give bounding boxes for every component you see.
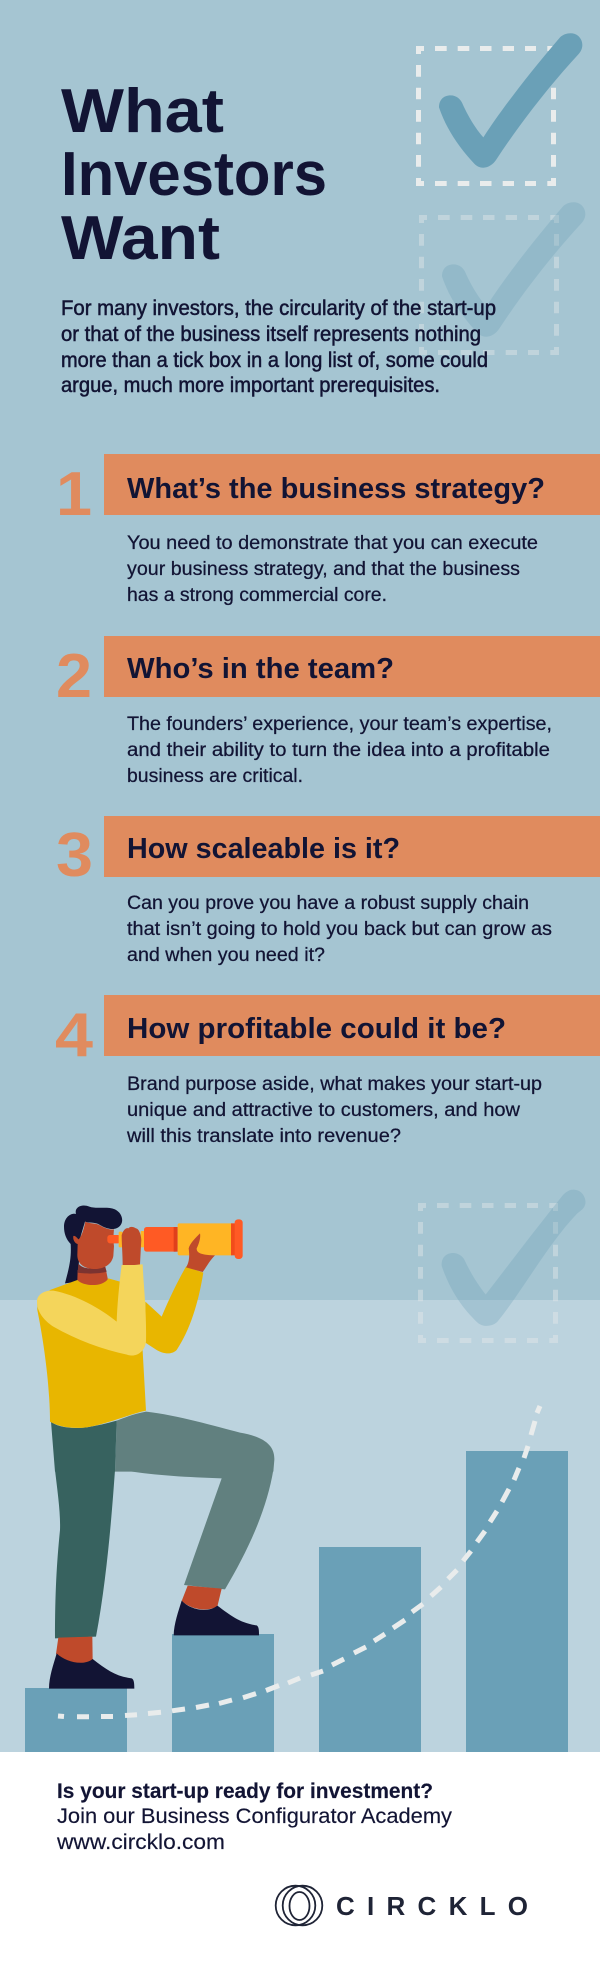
body text 3: and when you need it?: [127, 945, 325, 966]
body text 2: The founders’ experience, your team’s expertise,: [127, 714, 552, 735]
body text 1: [127, 533, 538, 606]
heading 1: What’s the business strategy?: [127, 473, 545, 505]
logo: Circklo: [276, 1886, 528, 1925]
face: [73, 1222, 114, 1269]
person: ankles and shoes: [49, 1586, 259, 1689]
raised far arm: [145, 1267, 203, 1353]
growth curve: dashed arrow line: [58, 1406, 540, 1717]
footer call to action: Join our Business Configurator Academy: [57, 1805, 453, 1828]
person: upper body, head and telescope: [37, 1205, 243, 1428]
body text 4: unique and attractive to customers, and how: [127, 1100, 520, 1121]
body text 2: [127, 714, 552, 787]
title: Investors: [61, 140, 327, 209]
icon: solid checkbox: [416, 33, 582, 186]
body text 1: your business strategy, and that the business: [127, 559, 520, 580]
body text 4: [126, 1074, 542, 1147]
body text 4: will this translate into revenue?: [126, 1126, 401, 1147]
panel: question 3: [56, 816, 600, 966]
icon: faded checkbox at horizon: [418, 1190, 586, 1343]
footer call to action: www.circklo.com: [56, 1831, 225, 1854]
footer call to action: [56, 1780, 453, 1854]
intro text: argue, much more important prerequisites.: [61, 374, 440, 397]
body text 3: that isn’t going to hold you back but can grow as: [127, 919, 552, 940]
heading bar 2: [104, 636, 600, 697]
near hand: [122, 1227, 141, 1265]
bar chart: rising steps: [25, 1451, 568, 1752]
number 3: 3: [56, 821, 93, 890]
background: white footer: [0, 1752, 600, 1970]
hair: [64, 1205, 122, 1283]
heading 3: How scaleable is it?: [127, 833, 400, 865]
body text 1: has a strong commercial core.: [127, 585, 387, 606]
intro text: [61, 297, 496, 397]
logo mark: [276, 1886, 322, 1925]
body text 2: and their ability to turn the idea into a profitable: [127, 740, 550, 761]
background: lower pale blue: [0, 1300, 600, 1752]
body text 1: You need to demonstrate that you can execute: [127, 533, 538, 554]
background: upper blue: [0, 0, 600, 1300]
sweater torso: [37, 1278, 146, 1428]
telescope: [107, 1219, 243, 1259]
body text 4: Brand purpose aside, what makes your start-up: [127, 1074, 542, 1095]
intro text: or that of the business itself represents nothing: [61, 323, 481, 346]
title: What: [61, 77, 224, 146]
footer call to action: Is your start-up ready for investment?: [57, 1780, 433, 1803]
title: [61, 77, 327, 273]
panel: question 2: [56, 636, 600, 787]
neck: [77, 1267, 108, 1286]
heading bar 1: [104, 454, 600, 515]
body text 3: [127, 893, 552, 966]
heading bar 4: [104, 995, 600, 1056]
heading bar 3: [104, 816, 600, 877]
panel: question 1: [56, 454, 600, 606]
body text 3: Can you prove you have a robust supply chain: [127, 893, 529, 914]
near arm sleeve: [37, 1264, 146, 1356]
title: Want: [61, 204, 220, 273]
heading 2: Who’s in the team?: [127, 653, 394, 685]
panel: question 4: [55, 995, 600, 1147]
icon: faded checkbox: [419, 202, 585, 355]
number 1: 1: [56, 460, 92, 529]
far hand: [186, 1233, 215, 1272]
body text 2: business are critical.: [127, 766, 303, 787]
illustration: investor with telescope: [37, 1205, 274, 1689]
person: back leg and raised leg: [51, 1412, 274, 1638]
intro text: more than a tick box in a long list of, some could: [61, 349, 488, 372]
number 4: 4: [55, 1001, 94, 1070]
heading 4: How profitable could it be?: [127, 1013, 506, 1045]
logo wordmark: CIRCKLO: [336, 1891, 528, 1921]
number 2: 2: [56, 642, 92, 711]
intro text: For many investors, the circularity of the start-up: [61, 297, 496, 320]
